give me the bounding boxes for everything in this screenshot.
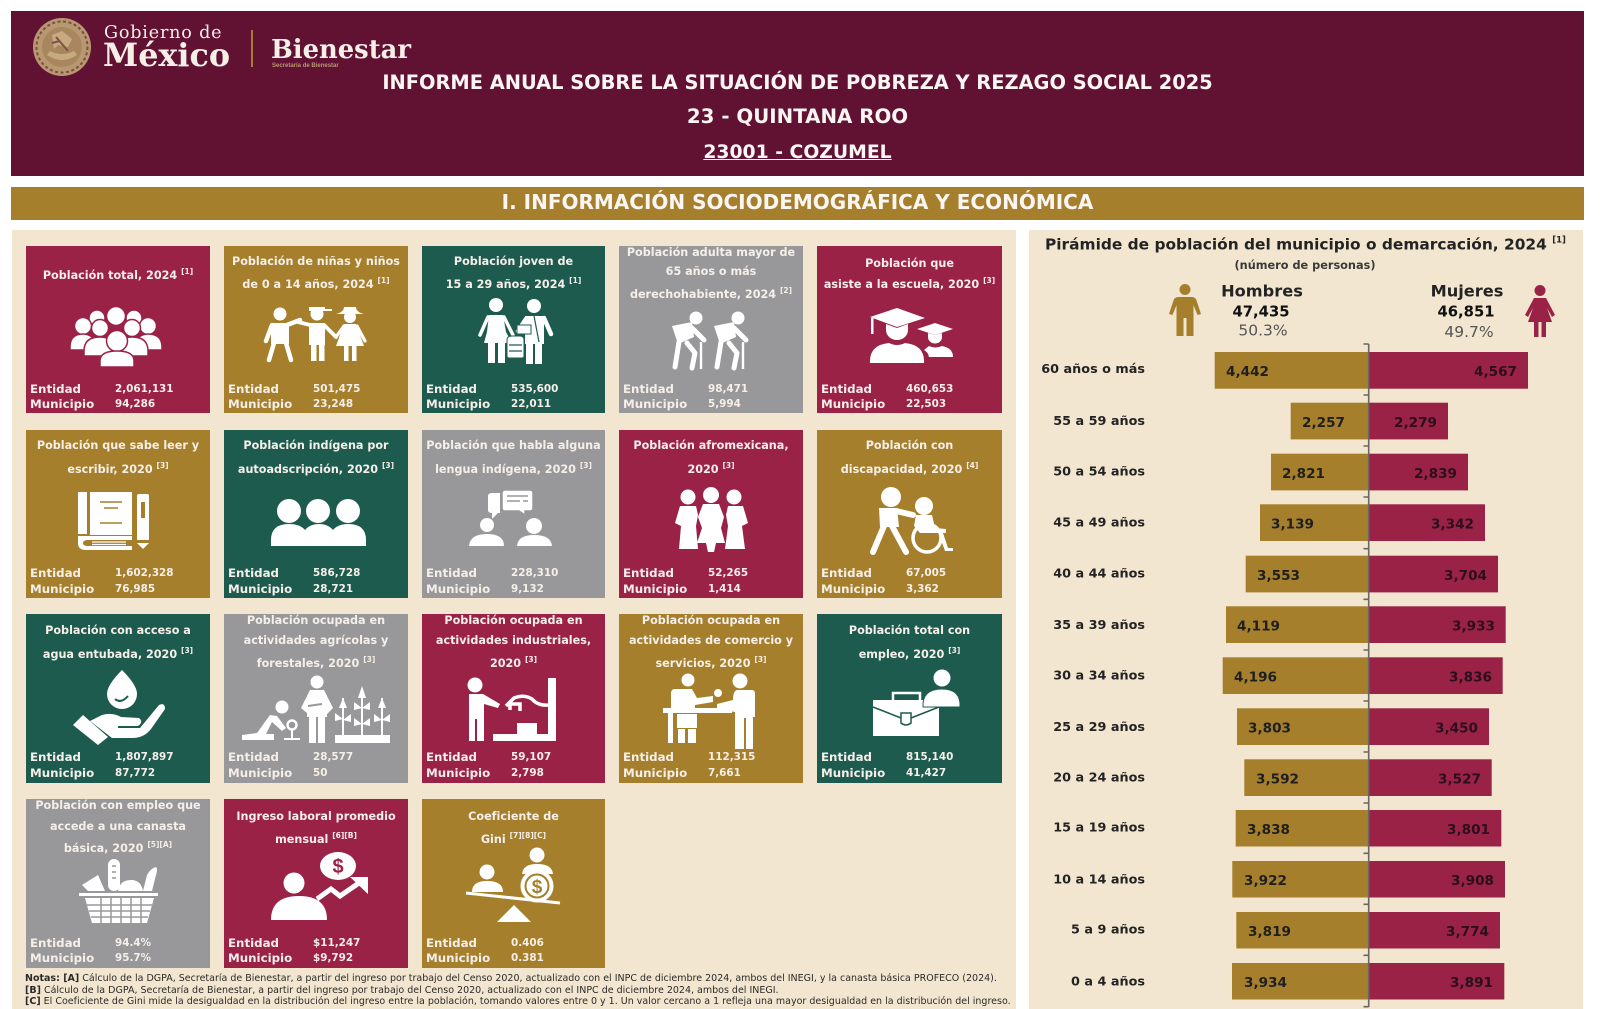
data values: Municipio — [228, 951, 292, 965]
pyramid subtitle: (número de personas) — [1234, 259, 1376, 272]
card title — [627, 246, 795, 301]
pyramid title: [1] — [1552, 236, 1566, 246]
data values: 28,721 — [313, 583, 353, 595]
data values — [817, 750, 1002, 782]
data values: Entidad — [623, 566, 674, 580]
row: 30 a 34 años: 3,836 — [1449, 670, 1492, 686]
report title: INFORME ANUAL SOBRE LA SITUACIÓN DE POBREZA Y REZAGO SOCIAL 2025 — [382, 71, 1213, 94]
icon: briefcase and person — [873, 669, 961, 737]
row: 5 a 9 años — [1071, 912, 1500, 948]
men totals — [1221, 282, 1303, 340]
data values: Entidad — [426, 566, 477, 580]
footnotes — [25, 973, 1015, 1009]
row: 55 a 59 años: 2,257 — [1302, 415, 1345, 431]
data values: 2,061,131 — [115, 383, 174, 395]
row: 40 a 44 años: 40 a 44 años — [1053, 566, 1145, 582]
row: 15 a 19 años: 3,801 — [1447, 822, 1490, 838]
card title: Población que habla alguna — [426, 439, 601, 452]
card title — [426, 439, 601, 476]
row: 30 a 34 años: 30 a 34 años — [1053, 668, 1145, 684]
row: 60 años o más: 60 años o más — [1041, 362, 1145, 377]
card: total con empleo — [817, 614, 1002, 783]
row: 50 a 54 años: 2,821 — [1282, 466, 1325, 482]
row: 30 a 34 años: 4,196 — [1234, 670, 1277, 686]
data values — [30, 566, 174, 596]
row: 35 a 39 años: 3,933 — [1452, 618, 1495, 634]
logo: Gobierno de México and Bienestar — [33, 18, 412, 76]
men totals: 50.3% — [1238, 322, 1288, 340]
icon: balance scale — [466, 847, 561, 923]
women totals: 46,851 — [1437, 304, 1495, 320]
data values — [623, 566, 748, 596]
card title: Población ocupada en — [642, 614, 780, 627]
card title — [619, 614, 803, 672]
data values: Entidad — [821, 566, 872, 580]
row: 25 a 29 años: 3,450 — [1435, 720, 1478, 736]
data values: 2,798 — [511, 767, 544, 779]
card title — [224, 799, 408, 857]
card title: Población adulta mayor de — [627, 246, 795, 259]
card title: discapacidad, 2020 [4] — [841, 461, 978, 476]
data values: Municipio — [30, 766, 94, 780]
row: 0 a 4 años: 3,891 — [1450, 975, 1493, 991]
row: 50 a 54 años: 50 a 54 años — [1053, 464, 1145, 480]
icon: children — [264, 307, 367, 362]
data values: 98,471 — [708, 383, 748, 395]
icon: person pushing a wheelchair — [870, 487, 953, 555]
card title: 2020 [3] — [687, 461, 735, 476]
card title — [26, 799, 210, 857]
card title: 2020 [3] — [490, 655, 537, 670]
row: 60 años o más — [1041, 352, 1528, 389]
data values: Municipio — [426, 766, 490, 780]
row: 60 años o más: 4,567 — [1474, 364, 1517, 380]
data values: 59,107 — [511, 751, 551, 763]
data values — [619, 750, 803, 782]
card: agua entubada — [26, 614, 210, 783]
row: 10 a 14 años — [1053, 861, 1505, 898]
municipality heading: 23001 - COZUMEL — [703, 142, 892, 163]
row: 45 a 49 años: 3,139 — [1271, 516, 1314, 532]
row: 45 a 49 años — [1053, 504, 1485, 541]
icon: people talking — [469, 490, 552, 546]
footnotes: [B] Cálculo de la DGPA, Secretaría de Bienestar, a partir del ingreso por trabajo del Censo 2020, actualizado con el INPC de diciembre 2024, ambos del INEGI. — [25, 984, 779, 996]
panel: population pyramid — [1029, 230, 1583, 1009]
card title: servicios, 2020 [3] — [656, 655, 766, 670]
row: 55 a 59 años: 55 a 59 años — [1053, 414, 1145, 429]
data values: Entidad — [426, 936, 477, 950]
data values: Municipio — [821, 766, 885, 780]
data values — [228, 382, 360, 411]
card: actividades industriales — [422, 614, 605, 783]
data values: Municipio — [30, 582, 94, 596]
data values: 22,503 — [906, 398, 946, 410]
card: afromexicana — [619, 430, 803, 598]
row: 15 a 19 años: 15 a 19 años — [1053, 820, 1145, 836]
card title: escribir, 2020 [3] — [67, 461, 169, 476]
data values: Entidad — [821, 382, 872, 396]
icon: balance scale: $ — [532, 877, 543, 898]
card title: Población que — [865, 257, 954, 270]
row: 45 a 49 años: 3,342 — [1431, 516, 1474, 532]
card title: derechohabiente, 2024 [2] — [630, 286, 792, 301]
card title: lengua indígena, 2020 [3] — [435, 461, 592, 476]
icon: national seal — [33, 18, 91, 76]
row: 15 a 19 años: 3,838 — [1247, 822, 1290, 838]
data values: Municipio — [426, 951, 490, 965]
data values: Entidad — [228, 750, 279, 764]
data values: 586,728 — [313, 567, 360, 579]
data values: Entidad — [30, 750, 81, 764]
card title: Población con — [866, 439, 953, 452]
pyramid title: Pirámide de población del municipio o demarcación, 2024 — [1045, 236, 1547, 254]
row: 0 a 4 años — [1071, 963, 1504, 1000]
card title: Población ocupada en — [247, 614, 385, 627]
México: México — [103, 37, 230, 74]
data values: $9,792 — [313, 952, 353, 964]
card title: asiste a la escuela, 2020 [3] — [824, 276, 995, 291]
data values: 501,475 — [313, 383, 360, 395]
row: 20 a 24 años: 3,592 — [1256, 772, 1299, 788]
data values: 535,600 — [511, 383, 558, 395]
data values: 9,132 — [511, 583, 544, 595]
data values: 67,005 — [906, 567, 946, 579]
data values: Entidad — [821, 750, 872, 764]
data values: Entidad — [623, 382, 674, 396]
card title: accede a una canasta — [50, 820, 186, 833]
card title — [238, 439, 394, 476]
card title: actividades industriales, — [436, 634, 591, 647]
row: 5 a 9 años: 3,774 — [1446, 924, 1489, 940]
card title: actividades de comercio y — [629, 634, 793, 647]
row: 25 a 29 años: 3,803 — [1248, 720, 1291, 736]
data values: Entidad — [228, 382, 279, 396]
data values — [422, 936, 605, 968]
data values: Entidad — [30, 382, 81, 396]
icon: crowd — [70, 307, 162, 366]
men totals: Hombres — [1221, 282, 1303, 300]
card title: mensual [6][B] — [275, 831, 357, 846]
card: ingreso laboral — [224, 799, 408, 968]
data values: 5,994 — [708, 398, 741, 410]
data values: 1,602,328 — [115, 567, 174, 579]
row: 25 a 29 años — [1053, 708, 1489, 745]
pyramid axis — [1364, 344, 1369, 1007]
icon: commerce people at a table — [663, 673, 756, 750]
row: 20 a 24 años: 3,527 — [1438, 772, 1481, 788]
row: 30 a 34 años — [1053, 657, 1503, 694]
row: 10 a 14 años: 10 a 14 años — [1053, 872, 1145, 888]
card title: empleo, 2020 [3] — [859, 646, 960, 661]
card title — [446, 255, 581, 291]
card: población joven — [422, 246, 605, 413]
data values: 1,414 — [708, 583, 741, 595]
icon: elderly people — [672, 312, 748, 370]
data values — [228, 750, 353, 780]
data values: 50 — [313, 767, 327, 779]
row: 35 a 39 años — [1053, 606, 1506, 643]
card: canasta básica — [26, 799, 210, 968]
data values: Municipio — [623, 766, 687, 780]
Gobierno de: Gobierno de — [104, 23, 222, 43]
row: 40 a 44 años — [1053, 556, 1498, 592]
icon: graduates — [870, 308, 953, 363]
row: 25 a 29 años: 25 a 29 años — [1053, 720, 1145, 735]
data values — [821, 566, 946, 596]
data values — [821, 382, 953, 411]
data values: 7,661 — [708, 767, 741, 779]
card title: Población que sabe leer y — [37, 439, 199, 452]
card title — [824, 257, 995, 291]
data values — [623, 382, 748, 411]
card title — [817, 614, 1002, 672]
card title: Población joven de — [454, 255, 573, 268]
data values: Municipio — [30, 951, 94, 965]
card: niñas y niños — [224, 246, 408, 413]
section band: I. INFORMACIÓN SOCIODEMOGRÁFICA Y ECONÓMICA — [502, 190, 1093, 214]
card title: de 0 a 14 años, 2024 [1] — [242, 276, 390, 291]
card title: Población ocupada en — [444, 614, 583, 627]
data values — [30, 382, 174, 411]
row: 15 a 19 años — [1053, 810, 1501, 846]
icon: woman — [1525, 285, 1555, 337]
card title: Población con empleo que — [35, 799, 201, 812]
data values: 94,286 — [115, 398, 155, 410]
row: 50 a 54 años: 2,839 — [1414, 466, 1457, 482]
card title — [43, 624, 193, 661]
card title: básica, 2020 [5][A] — [64, 840, 172, 855]
row: 60 años o más: 4,442 — [1226, 364, 1269, 380]
row: 35 a 39 años: 4,119 — [1237, 618, 1280, 634]
row: 20 a 24 años — [1053, 759, 1492, 796]
data values: $11,247 — [313, 937, 360, 949]
card title: 65 años o más — [666, 265, 756, 278]
card: población total — [26, 246, 210, 413]
card title: agua entubada, 2020 [3] — [43, 646, 193, 661]
data values: 1,807,897 — [115, 751, 174, 763]
data values: 112,315 — [708, 751, 755, 763]
row: 55 a 59 años: 2,279 — [1394, 415, 1437, 431]
data values: 52,265 — [708, 567, 748, 579]
card title: Coeficiente de — [468, 810, 559, 823]
icon: food basket — [79, 859, 159, 924]
card: sabe leer y escribir — [26, 430, 210, 598]
row: 40 a 44 años: 3,553 — [1257, 568, 1300, 584]
data values: Entidad — [228, 936, 279, 950]
data values: 28,577 — [313, 751, 353, 763]
card: población indígena — [224, 430, 408, 598]
data values — [224, 936, 408, 968]
data values: Entidad — [426, 750, 477, 764]
icon: farmers and plants — [242, 676, 390, 743]
icon: income growth — [271, 852, 369, 921]
card title: Ingreso laboral promedio — [236, 810, 396, 823]
row: 5 a 9 años: 3,819 — [1248, 924, 1291, 940]
data values: 228,310 — [511, 567, 558, 579]
data values — [426, 382, 558, 411]
data values: 87,772 — [115, 767, 155, 779]
state heading: 23 - QUINTANA ROO — [687, 105, 908, 128]
data values: Municipio — [30, 397, 94, 411]
card: discapacidad — [817, 430, 1002, 598]
data values: 815,140 — [906, 751, 953, 763]
data values: Municipio — [228, 766, 292, 780]
data values: 95.7% — [115, 952, 151, 964]
card title — [37, 439, 199, 476]
card title: Población afromexicana, — [633, 439, 789, 452]
data values — [228, 566, 360, 596]
data values — [26, 936, 210, 968]
row: 0 a 4 años: 3,934 — [1244, 975, 1287, 991]
women totals: 49.7% — [1444, 323, 1494, 341]
card: actividades agrícolas — [224, 614, 408, 783]
data values: Entidad — [30, 566, 81, 580]
row: 40 a 44 años: 3,704 — [1444, 568, 1487, 584]
row: 35 a 39 años: 35 a 39 años — [1053, 618, 1145, 633]
card title — [633, 439, 789, 476]
data values: 0.406 — [511, 937, 544, 949]
card title: Población con acceso a — [45, 624, 191, 637]
icon: three people — [271, 499, 366, 546]
data values: Municipio — [426, 397, 490, 411]
card title: Población indígena por — [243, 439, 389, 452]
data values: Municipio — [426, 582, 490, 596]
data values: Municipio — [228, 397, 292, 411]
card: comercio y servicios — [619, 614, 803, 783]
footnotes: [C] El Coeficiente de Gini mide la desigualdad en la distribución del ingreso entre la población, tomando valores entre 0 y 1. Un valor cercano a 1 refleja una mayor desigualdad en la distribución del ingreso. — [25, 996, 1011, 1007]
card title: forestales, 2020 [3] — [257, 655, 375, 670]
data values: Entidad — [228, 566, 279, 580]
data values: Municipio — [821, 582, 885, 596]
row: 10 a 14 años: 3,922 — [1244, 873, 1287, 889]
card: coeficiente de Gini — [422, 799, 605, 968]
row: 5 a 9 años: 5 a 9 años — [1071, 922, 1145, 938]
row: 10 a 14 años: 3,908 — [1451, 873, 1494, 889]
icon: man — [1169, 284, 1201, 336]
data values: 94.4% — [115, 937, 151, 949]
header banner — [11, 11, 1584, 176]
Bienestar: Bienestar — [271, 35, 411, 65]
icon: hand holding water drop — [73, 670, 165, 745]
data values: 23,248 — [313, 398, 353, 410]
data values: Entidad — [426, 382, 477, 396]
data values: Municipio — [623, 397, 687, 411]
card title — [232, 255, 400, 291]
card title: 15 a 29 años, 2024 [1] — [446, 276, 581, 291]
icon: young people — [478, 298, 554, 364]
row: 55 a 59 años — [1053, 403, 1448, 439]
data values: 3,362 — [906, 583, 939, 595]
icon: income growth: $ — [332, 856, 344, 878]
data values: 41,427 — [906, 767, 946, 779]
data values — [30, 750, 174, 780]
icon: three people standing — [675, 487, 748, 552]
divider — [251, 30, 252, 67]
data values: 76,985 — [115, 583, 155, 595]
card title — [436, 614, 591, 670]
data values: Municipio — [821, 397, 885, 411]
card: asiste a la escuela — [817, 246, 1002, 413]
card title: autoadscripción, 2020 [3] — [238, 461, 394, 476]
data values: 460,653 — [906, 383, 953, 395]
card title: Población de niñas y niños — [232, 255, 400, 268]
data values: 22,011 — [511, 398, 551, 410]
panel: indicators — [12, 230, 1016, 1009]
card title: Población total con — [849, 624, 970, 637]
card title — [841, 439, 978, 476]
women totals: Mujeres — [1431, 282, 1503, 300]
icon: book and pen — [78, 492, 149, 550]
data values: Municipio — [228, 582, 292, 596]
row: 45 a 49 años: 45 a 49 años — [1053, 516, 1145, 530]
data values: Entidad — [623, 750, 674, 764]
women totals — [1431, 282, 1503, 341]
footnotes: Notas: [A] Cálculo de la DGPA, Secretaría de Bienestar, a partir del ingreso por trabajo del Censo 2020, actualizado con el INPC de diciembre 2024, ambos del INEGI, y la canasta básica PROFECO (2024). — [25, 973, 997, 984]
row: 20 a 24 años: 20 a 24 años — [1053, 770, 1145, 786]
card title: Población total, 2024 [1] — [43, 267, 193, 282]
data values — [422, 750, 605, 782]
row: 0 a 4 años: 0 a 4 años — [1071, 974, 1145, 990]
data values: Entidad — [30, 936, 81, 950]
row: 50 a 54 años — [1053, 454, 1468, 490]
data values: 0.381 — [511, 952, 544, 964]
section band — [11, 187, 1584, 220]
data values: Municipio — [623, 582, 687, 596]
data values — [426, 566, 558, 596]
Secretaría de Bienestar: Secretaría de Bienestar — [272, 63, 339, 69]
card title — [422, 799, 605, 857]
card: lengua indígena — [422, 430, 605, 598]
icon: industrial worker and machine — [468, 678, 556, 741]
card: adulta mayor — [619, 246, 803, 413]
card title — [244, 614, 388, 670]
card title: actividades agrícolas y — [244, 634, 388, 647]
card title: Gini [7][8][C] — [481, 831, 546, 846]
men totals: 47,435 — [1232, 304, 1290, 320]
